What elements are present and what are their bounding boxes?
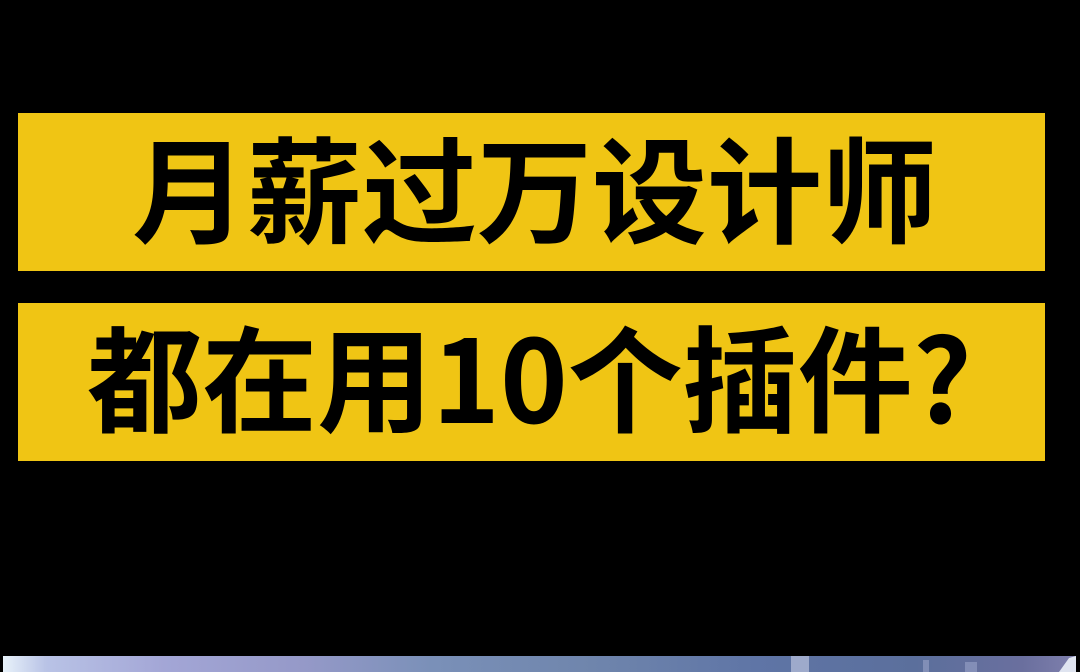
title text: line 1: 月薪过万设计师: [132, 102, 937, 268]
image strip: cropped photo at bottom edge: [3, 656, 1076, 672]
title banner: line 1: [18, 113, 1045, 271]
title text: line 2: 都在用10个插件?: [87, 291, 972, 457]
title banner: line 2: [18, 303, 1045, 461]
